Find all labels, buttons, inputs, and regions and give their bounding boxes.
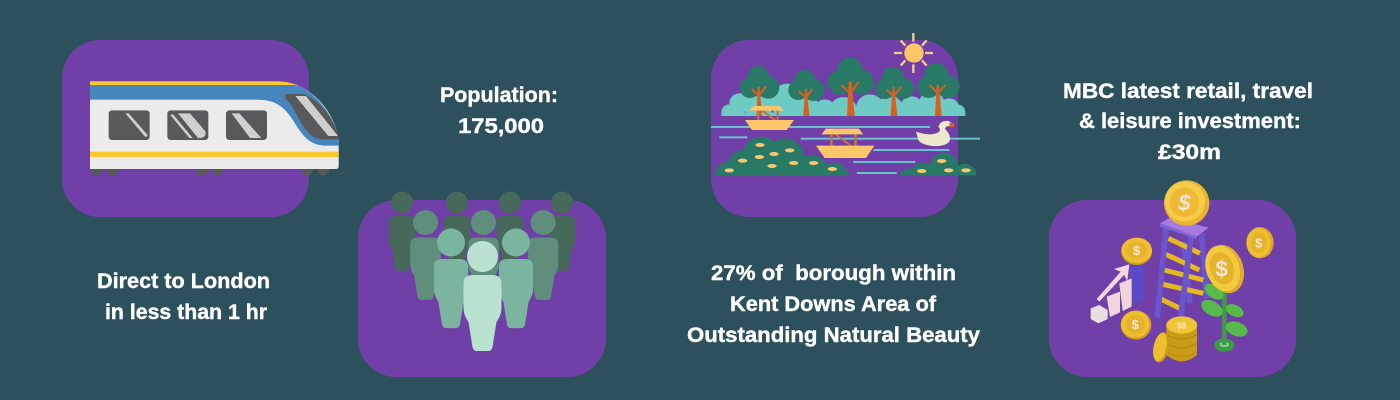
caption: train xyxy=(97,270,270,324)
icon: investment growth xyxy=(1091,180,1274,364)
coin plant: $ xyxy=(1216,257,1228,282)
panel background: train xyxy=(62,40,309,217)
small coins: $ xyxy=(1133,244,1140,258)
panel background: investment xyxy=(1049,200,1296,377)
caption: train: in less than 1 hr xyxy=(105,301,267,324)
coin stack: $$ xyxy=(1177,320,1187,330)
swan xyxy=(916,121,954,146)
boat centre xyxy=(816,129,874,158)
boat left xyxy=(745,106,794,130)
panel: investment xyxy=(1049,80,1313,377)
bar chart with arrow xyxy=(1091,264,1143,323)
caption: population: Population: xyxy=(440,84,558,107)
caption: population: 175,000 xyxy=(458,115,544,138)
caption: train: Direct to London xyxy=(97,270,270,293)
small coins: $ xyxy=(1132,318,1139,332)
caption: investment xyxy=(1063,80,1313,164)
top coin: $ xyxy=(1177,190,1191,215)
caption: investment: & leisure investment: xyxy=(1079,110,1301,133)
caption: natural beauty: Outstanding Natural Beauty xyxy=(687,324,980,347)
panel background: natural beauty xyxy=(711,40,958,217)
icon: train xyxy=(90,81,339,175)
icon: park landscape xyxy=(711,33,980,176)
caption: natural beauty xyxy=(687,262,980,347)
ladder xyxy=(1157,218,1209,318)
caption: natural beauty: Kent Downs Area of xyxy=(730,293,937,316)
panel: natural beauty xyxy=(687,33,980,347)
caption: investment: £30m xyxy=(1158,141,1221,164)
caption: investment: MBC latest retail, travel xyxy=(1063,80,1313,103)
coin stack xyxy=(1151,316,1197,364)
panel: population xyxy=(358,84,606,377)
icon: crowd of people xyxy=(389,192,575,351)
panel background: population xyxy=(358,200,606,377)
caption: population xyxy=(440,84,558,138)
caption: natural beauty: 27% of borough within xyxy=(711,262,956,285)
infographic xyxy=(62,33,1312,377)
small coins xyxy=(1121,227,1274,340)
top coin xyxy=(1164,180,1209,226)
sun xyxy=(894,33,933,73)
panel: train xyxy=(62,40,339,324)
coin plant xyxy=(1198,240,1250,352)
small coins: $ xyxy=(1255,236,1262,250)
bushes with flowers xyxy=(715,136,976,176)
